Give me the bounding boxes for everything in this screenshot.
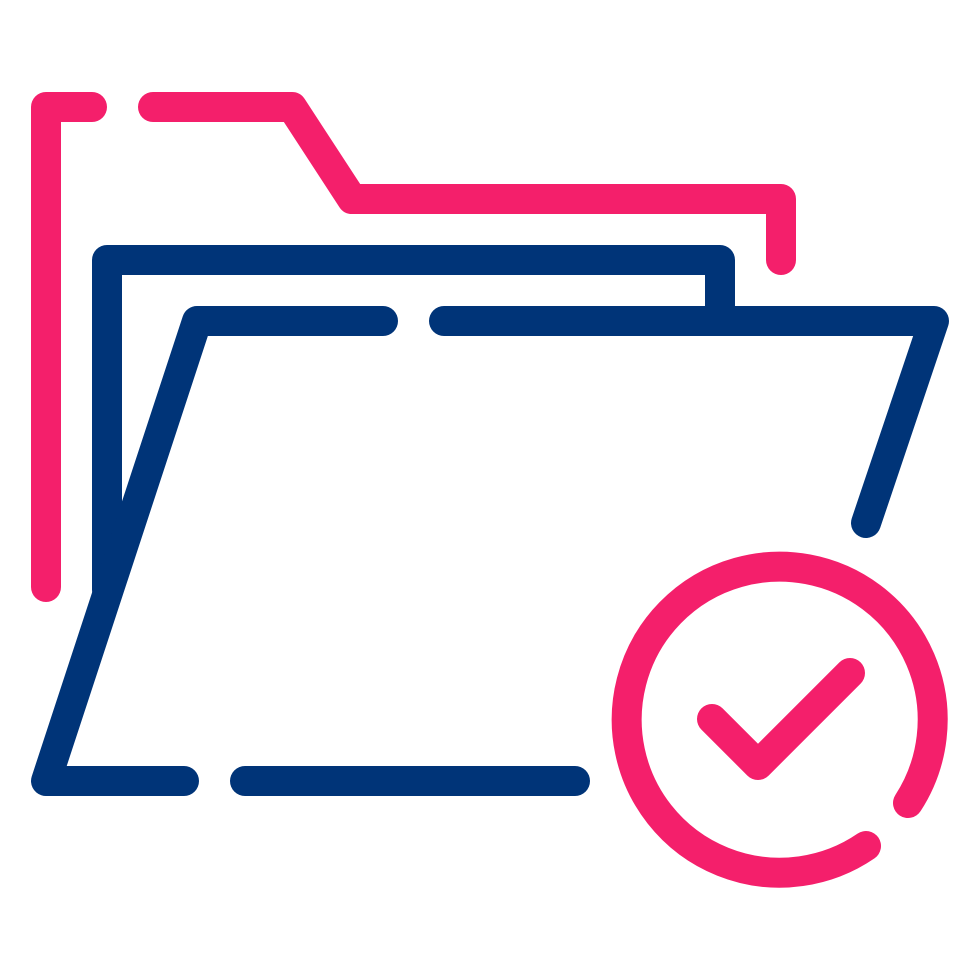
- check mark (pink): [712, 673, 850, 765]
- check badge circle (pink): [627, 567, 933, 873]
- front folder outline (navy): [46, 321, 934, 781]
- middle folder sheet (navy): [107, 260, 720, 590]
- back folder outline (pink): [46, 107, 781, 587]
